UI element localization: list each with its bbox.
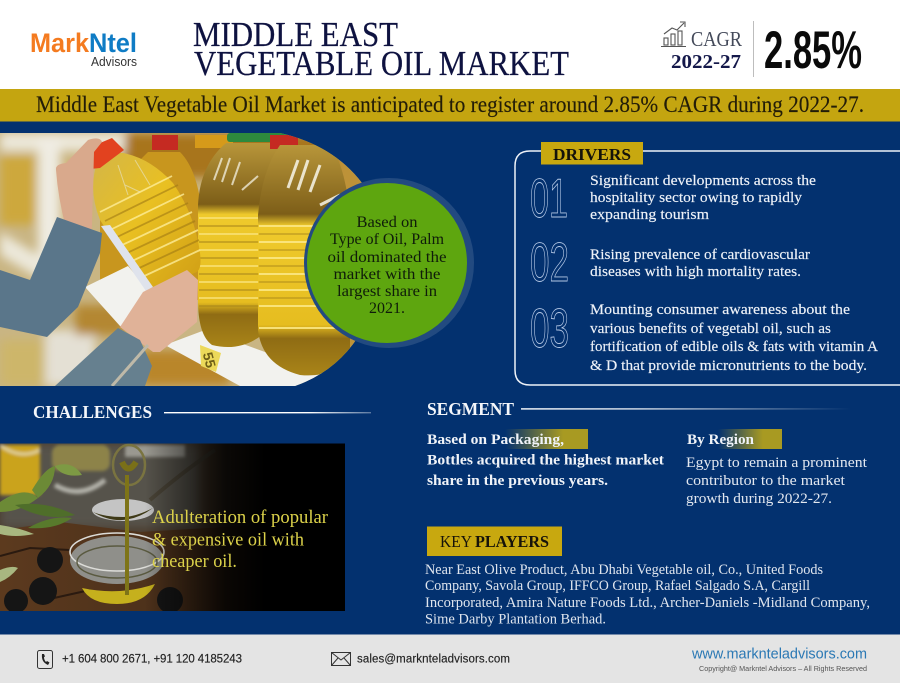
driver 01 xyxy=(530,167,816,229)
callout: palm oil: 2021. xyxy=(369,300,405,317)
bowl xyxy=(70,536,164,584)
header: white strip xyxy=(0,0,900,89)
logo: MarkNtel Advisors: Mark xyxy=(30,28,90,58)
challenge text: & expensive oil with xyxy=(152,530,304,550)
CAGR label xyxy=(671,27,742,73)
driver 03: various benefits of vegetabl oil, such as xyxy=(590,321,831,337)
callout: palm oil: oil dominated the xyxy=(328,249,447,266)
lower hand xyxy=(120,270,198,352)
ladle xyxy=(113,445,145,485)
segment: packaging: Bottles acquired the highest market xyxy=(427,452,664,468)
phone numbers: +1 604 800 2671, +91 120 4185243 xyxy=(62,654,242,666)
panel: drivers xyxy=(515,142,900,385)
segment: by region: Egypt to remain a prominent xyxy=(686,455,868,471)
panel: challenges photo xyxy=(0,444,345,613)
upper hand xyxy=(56,138,102,229)
driver 03: & D that provide micronutrients to the body. xyxy=(590,358,867,374)
driver 01: 01 xyxy=(530,167,568,229)
background bottle xyxy=(100,152,202,300)
segment: by region: contributor to the market xyxy=(686,473,846,489)
heading: key players: PLAYERS xyxy=(475,532,549,551)
challenge text xyxy=(152,508,328,572)
challenge text: Adulteration of popular xyxy=(152,508,328,528)
callout: palm oil: Type of Oil, Palm xyxy=(330,231,444,248)
website: www.marknteladvisors.com xyxy=(691,646,867,662)
segment: packaging: share in the previous years. xyxy=(427,473,608,489)
callout: palm oil: largest share in xyxy=(337,283,437,300)
heading: segment: SEGMENT xyxy=(427,399,514,419)
CAGR label: CAGR xyxy=(691,27,742,51)
callout: palm oil xyxy=(304,178,474,348)
callout: palm oil: Based on xyxy=(356,214,418,231)
heading: key players: KEY xyxy=(440,532,472,551)
key players list xyxy=(425,562,870,628)
email: sales@marknteladvisors.com xyxy=(357,654,510,666)
segment: packaging: Based on Packaging, xyxy=(427,432,564,448)
logo: MarkNtel Advisors: Ntel xyxy=(89,28,137,58)
key players list: Sime Darby Plantation Berhad. xyxy=(425,612,606,628)
driver 01: hospitality sector owing to rapidly xyxy=(590,190,803,206)
heading: challenges: CHALLENGES xyxy=(33,402,152,422)
divider xyxy=(753,21,754,77)
callout: palm oil: market with the xyxy=(334,266,441,283)
price tag: 55 xyxy=(200,350,219,370)
driver 01: Significant developments across the xyxy=(590,173,816,189)
driver 02: diseases with high mortality rates. xyxy=(590,264,801,280)
key players list: Near East Olive Product, Abu Dhabi Vegetable oil, Co., United Foods xyxy=(425,562,823,578)
CAGR label: 2022-27 xyxy=(671,51,741,73)
driver 03: 03 xyxy=(530,297,569,359)
driver 03 xyxy=(530,297,878,374)
segment: packaging xyxy=(427,429,664,489)
footer bar xyxy=(0,634,900,683)
gold summary band xyxy=(0,89,900,122)
shelf edge xyxy=(86,266,146,326)
segment: by region: By Region xyxy=(687,432,755,448)
key players list: Incorporated, Amira Nature Foods Ltd., Archer-Daniels -Midland Company, xyxy=(425,595,870,611)
upper sleeve xyxy=(0,217,102,337)
segment: by region xyxy=(686,429,868,507)
price tag xyxy=(200,345,221,372)
challenge text: cheaper oil. xyxy=(152,552,237,572)
title: MIDDLE EAST xyxy=(193,15,398,54)
red cap xyxy=(94,138,124,169)
driver 02: 02 xyxy=(530,231,569,293)
title: VEGETABLE OIL MARKET xyxy=(194,44,569,83)
tilted bottle xyxy=(93,153,201,292)
lower sleeve xyxy=(55,328,152,386)
drivers heading: DRIVERS xyxy=(553,145,631,164)
drivers heading xyxy=(541,142,643,164)
driver 02: Rising prevalence of cardiovascular xyxy=(590,247,810,263)
oil stream xyxy=(125,475,129,595)
logo: MarkNtel Advisors: Advisors xyxy=(91,54,137,69)
logo: MarkNtel Advisors xyxy=(30,28,137,69)
icon: phone xyxy=(38,650,52,668)
olives xyxy=(4,547,183,613)
key players list: Company, Savola Group, IFFCO Group, Rafael Salgado S.A, Cargill xyxy=(425,578,810,594)
heading: key players xyxy=(427,526,562,556)
driver 03: fortification of edible oils & fats with vitamin A xyxy=(590,339,878,355)
bottle 3 xyxy=(258,145,350,375)
bottle 2 xyxy=(198,143,282,347)
title xyxy=(193,15,569,83)
icon: envelope xyxy=(332,652,350,666)
driver 02 xyxy=(530,231,810,293)
copyright: Copyright@ Markntel Advisors – All Rights Reserved xyxy=(699,664,867,673)
icon: growth chart xyxy=(661,22,686,46)
driver 03: Mounting consumer awareness about the xyxy=(590,302,850,318)
segment: by region: growth during 2022-27. xyxy=(686,491,832,507)
photo: hands holding oil bottle on shelf xyxy=(0,133,362,386)
driver 01: expanding tourism xyxy=(590,207,709,223)
